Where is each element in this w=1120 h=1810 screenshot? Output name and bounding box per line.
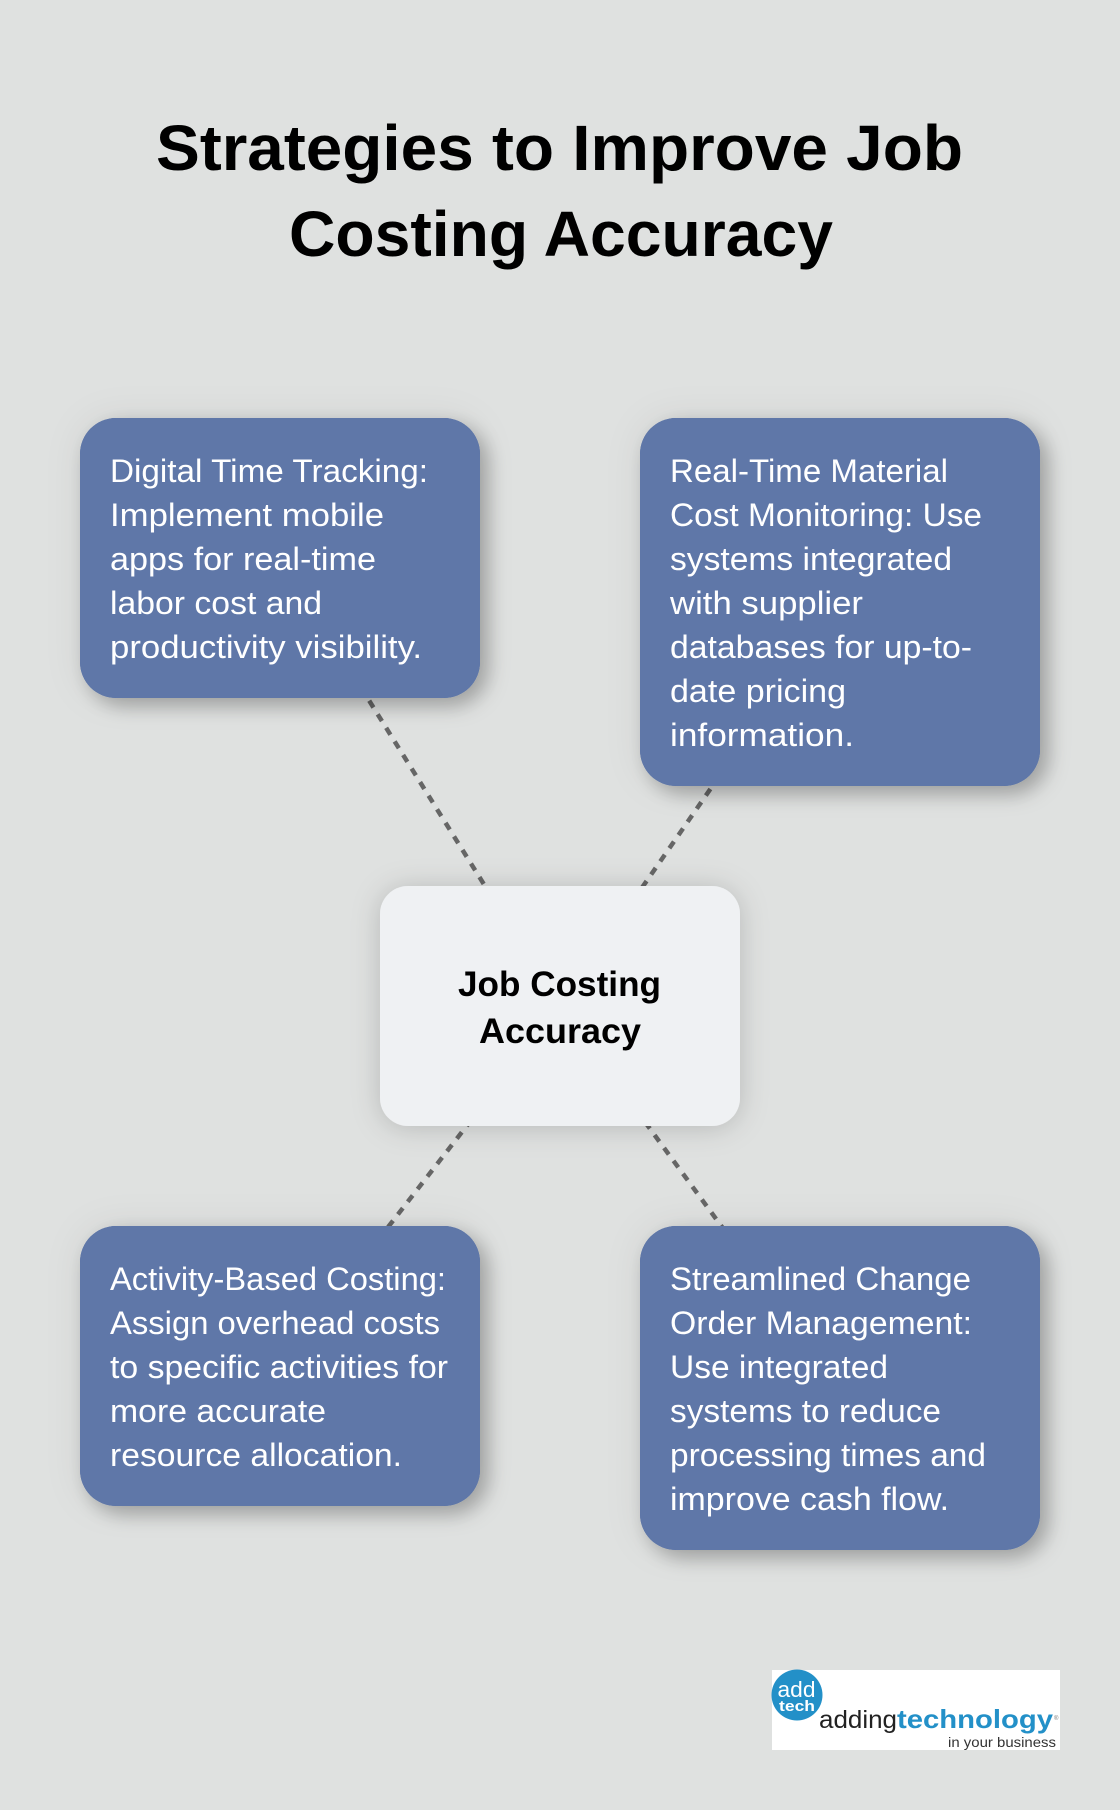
panel: digital time tracking: productivity visibility. xyxy=(110,629,422,665)
logo: adding technology: ® xyxy=(1054,1715,1059,1722)
panel: activity-based costing: more accurate xyxy=(110,1393,326,1429)
panel: real-time material cost monitoring: Cost Monitoring: Use xyxy=(670,497,982,533)
panel: activity-based costing: resource allocation. xyxy=(110,1437,402,1473)
panel: streamlined change order management: systems to reduce xyxy=(670,1393,941,1429)
panel: real-time material cost monitoring: with supplier xyxy=(669,585,863,621)
icon: add tech circle xyxy=(772,1670,822,1720)
connector: change order management to centre xyxy=(560,1006,840,1388)
title xyxy=(156,112,963,270)
logo: adding technology: in your business xyxy=(948,1734,1056,1750)
panel: job costing accuracy centre xyxy=(380,886,740,1126)
panel: digital time tracking: Implement mobile xyxy=(110,497,384,533)
connector: digital time tracking to centre xyxy=(280,558,560,1006)
panel: activity-based costing: Activity-Based Costing: xyxy=(110,1261,446,1297)
panel: digital time tracking: apps for real-time xyxy=(110,541,376,577)
logo: adding technology xyxy=(772,1670,1060,1750)
panel: real-time material cost monitoring: date pricing xyxy=(670,673,846,709)
panel: streamlined change order management: Streamlined Change xyxy=(670,1261,971,1297)
connector: activity-based costing to centre xyxy=(280,1006,560,1366)
panel: streamlined change order management: Order Management: xyxy=(670,1305,972,1341)
logo: adding technology: technology xyxy=(897,1704,1054,1734)
panel: digital time tracking xyxy=(80,418,480,698)
panel: streamlined change order management: processing times and xyxy=(670,1437,986,1473)
panel: activity-based costing: Assign overhead costs xyxy=(110,1305,440,1341)
panel: real-time material cost monitoring: systems integrated xyxy=(670,541,952,577)
panel: digital time tracking: labor cost and xyxy=(110,585,322,621)
panel: job costing accuracy centre: Accuracy xyxy=(479,1012,642,1051)
panel: streamlined change order management xyxy=(640,1226,1040,1550)
title: Costing Accuracy xyxy=(289,198,833,270)
panel: activity-based costing xyxy=(80,1226,480,1506)
panel: real-time material cost monitoring: information. xyxy=(670,717,854,753)
panel: job costing accuracy centre: Job Costing xyxy=(458,965,661,1004)
panel: real-time material cost monitoring: Real-Time Material xyxy=(670,453,948,489)
panel: activity-based costing: to specific activities for xyxy=(110,1349,448,1385)
panel: real-time material cost monitoring: databases for up-to- xyxy=(670,629,972,665)
connector: material cost monitoring to centre xyxy=(560,602,840,1006)
panel: streamlined change order management: improve cash flow. xyxy=(670,1481,949,1517)
panel: streamlined change order management: Use integrated xyxy=(670,1349,888,1385)
panel: real-time material cost monitoring xyxy=(640,418,1040,786)
panel: digital time tracking: Digital Time Tracking: xyxy=(110,453,428,489)
logo: adding technology: adding xyxy=(819,1706,897,1734)
icon: add tech circle: tech xyxy=(779,1698,815,1715)
icon: add tech circle: add xyxy=(778,1677,816,1702)
title: Strategies to Improve Job xyxy=(156,112,963,184)
